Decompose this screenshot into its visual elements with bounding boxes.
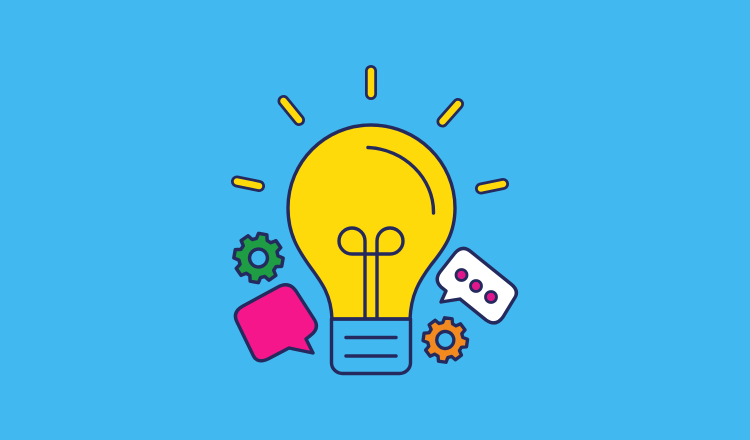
- light rays: [237, 71, 503, 188]
- icon: orange gear: [421, 315, 470, 365]
- icon: pink speech bubble: [235, 285, 316, 361]
- bulb highlight: [368, 148, 434, 213]
- icon: green gear: [230, 230, 287, 286]
- bubble dots: [456, 270, 496, 302]
- bulb filament: [339, 228, 403, 319]
- bulb base: [331, 319, 411, 374]
- icon: white speech bubble: [437, 248, 516, 323]
- bulb glass: [288, 125, 455, 319]
